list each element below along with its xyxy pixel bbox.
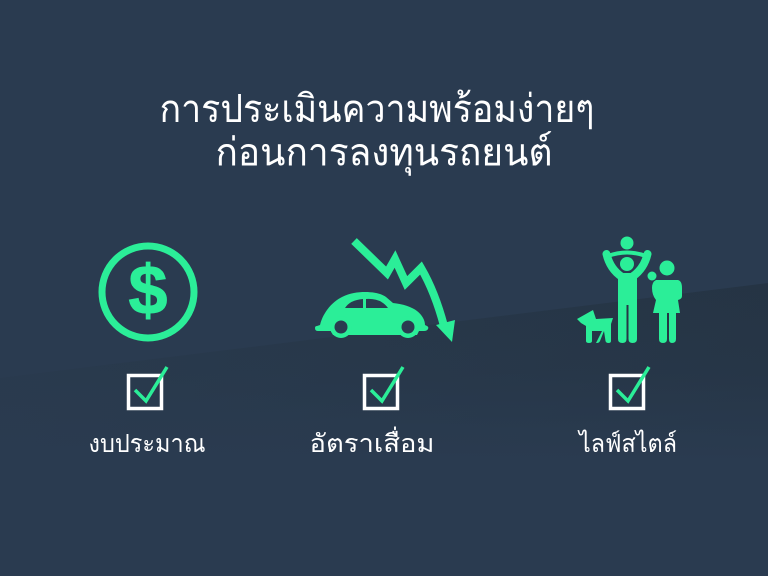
icon: dollar coin: [102, 246, 194, 338]
label: lifestyle: ไลฟ์สไตล์: [577, 429, 677, 458]
falling arrow: [354, 241, 455, 342]
dog: [577, 310, 613, 343]
label: depreciation: อัตราเสื่อม: [310, 426, 434, 458]
icon: dollar coin: $: [129, 251, 167, 329]
woman carrying baby: [648, 260, 682, 343]
icon: family with dog: [577, 236, 682, 343]
title: [160, 88, 594, 176]
checkbox: budget: [128, 367, 167, 408]
car: [315, 292, 428, 338]
adult carrying child: [606, 236, 648, 343]
checkbox: depreciation: [364, 367, 403, 408]
label: budget: งบประมาณ: [88, 430, 206, 458]
title: การประเมินความพร้อมง่ายๆ: [160, 88, 594, 131]
checkbox: lifestyle: [610, 367, 649, 408]
icon: car with falling arrow: [315, 241, 455, 342]
title: ก่อนการลงทุนรถยนต์: [216, 130, 552, 176]
